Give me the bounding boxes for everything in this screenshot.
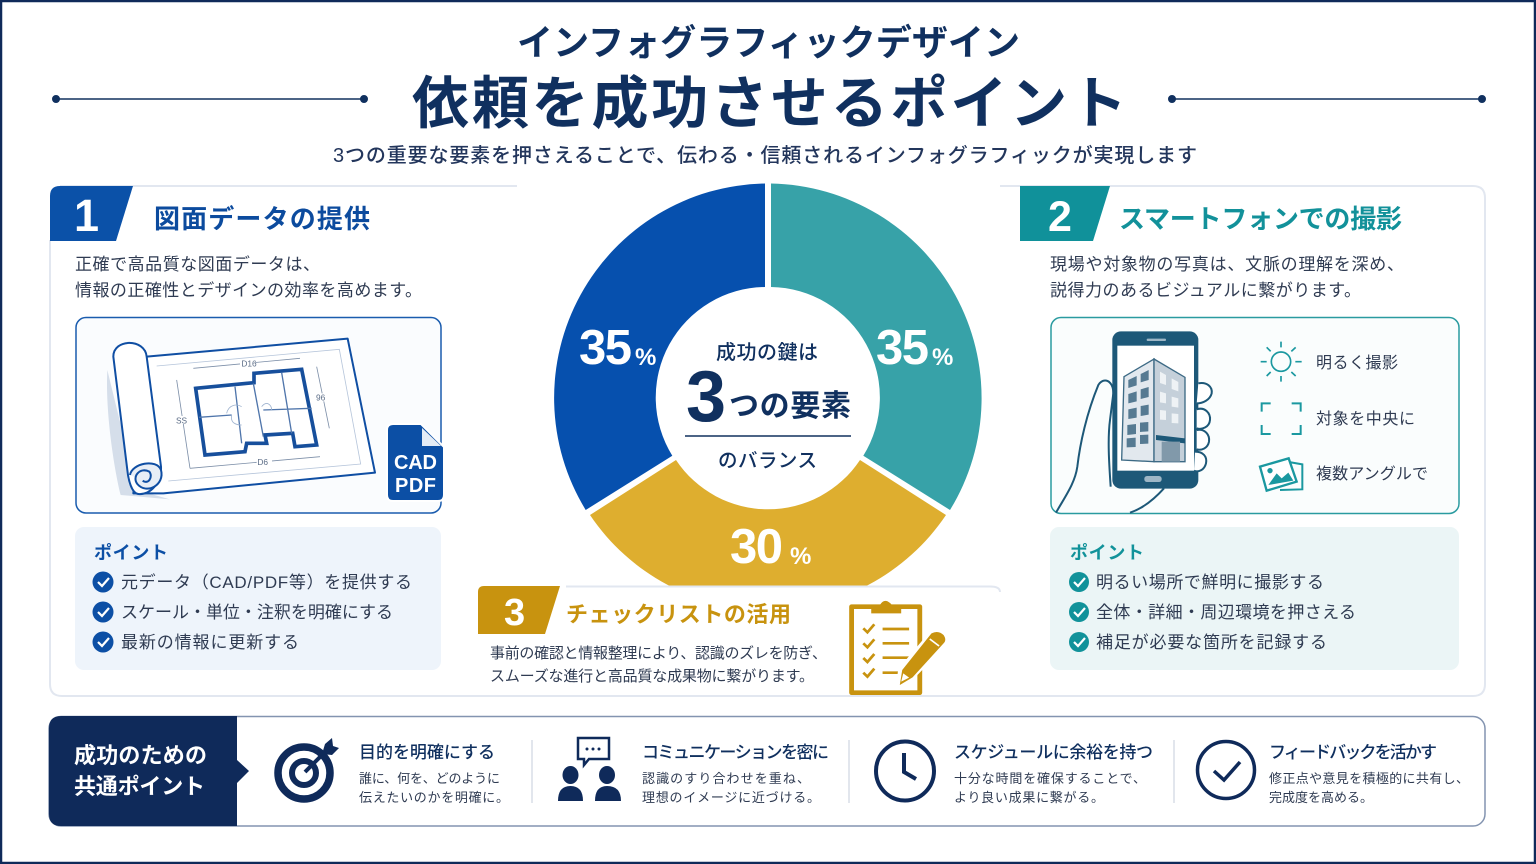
bottom common points bar — [49, 716, 1485, 826]
description: 現場や対象物の写真は、文脈の理解を深め、 — [1050, 255, 1404, 274]
heading: チェックリストの活用 — [566, 602, 791, 627]
item 4: feedback: フィードバックを活かす — [1269, 743, 1437, 762]
subtitle: 3つの重要な要素を押さえることで、伝わる・信頼されるインフォグラフィックが実現します — [333, 144, 1197, 167]
title line 1: インフォグラフィックデザイン — [517, 22, 1020, 63]
segment: gold 30% — [590, 460, 946, 610]
label: teal 35% — [876, 321, 953, 375]
item 3: schedule: スケジュールに余裕を持つ — [954, 743, 1153, 762]
illustration box: phone — [1051, 318, 1459, 514]
label: gold 30%: % — [790, 543, 811, 570]
title line 2: 依頼を成功させるポイント — [412, 72, 1127, 136]
item 3: schedule: 十分な時間を確保することで、 — [954, 771, 1146, 786]
points box: ポイント — [1070, 542, 1144, 563]
blueprint sheet — [107, 339, 375, 499]
heading: スマートフォンでの撮影 — [1119, 204, 1402, 234]
icon: people with speech bubble — [558, 738, 621, 801]
points box: ポイント — [94, 542, 168, 563]
panel 3: checklist — [478, 586, 1000, 695]
label: blue 35%: % — [635, 344, 656, 371]
item 2: communication — [558, 738, 829, 805]
tab: number 3 — [478, 586, 560, 634]
center text: つの要素 — [729, 390, 851, 423]
item 3: schedule: より良い成果に繋がる。 — [954, 790, 1104, 805]
icon labels: 対象を中央に — [1316, 410, 1415, 428]
tab: number 3: 3 — [504, 592, 525, 634]
point list: 元データ（CAD/PDF等）を提供する — [121, 572, 412, 592]
icon: CAD PDF file — [387, 424, 444, 501]
icon: check circle — [1198, 742, 1254, 798]
panel 2: smartphone photography — [1020, 186, 1459, 670]
point list: 全体・詳細・周辺環境を押さえる — [1096, 603, 1356, 622]
panel 1: drawing data — [50, 186, 444, 670]
segment: blue 35% — [554, 184, 765, 510]
description — [75, 254, 422, 300]
description: 事前の確認と情報整理により、認識のズレを防ぎ、 — [490, 645, 827, 662]
illustration box: blueprint: D6 — [257, 457, 268, 467]
main panel outline — [50, 186, 1485, 696]
icon: target — [278, 738, 339, 799]
item 4: feedback: 修正点や意見を積極的に共有し、 — [1269, 771, 1469, 786]
point list: 明るい場所で鮮明に撮影する — [1096, 573, 1324, 592]
center text — [685, 341, 851, 472]
label: teal 35%: 35 — [876, 321, 929, 375]
center text: のバランス — [718, 450, 817, 472]
icon: hand holding phone — [1056, 331, 1212, 513]
icon labels — [1316, 354, 1428, 483]
donut chart — [554, 184, 982, 610]
label: common points — [49, 716, 249, 826]
icon: sun — [1261, 342, 1302, 382]
label: teal 35%: % — [932, 344, 953, 371]
item 2: communication: コミュニケーションを密に — [642, 743, 829, 762]
center text: 3 — [686, 357, 726, 437]
illustration box: blueprint — [76, 318, 444, 513]
illustration box: blueprint: 96 — [316, 393, 326, 403]
description: スムーズな進行と高品質な成果物に繋がります。 — [490, 667, 814, 685]
points box — [1050, 527, 1459, 670]
tab: number 1: 1 — [74, 190, 99, 241]
illustration box: blueprint: D16 — [241, 359, 257, 369]
point list: 最新の情報に更新する — [121, 633, 299, 652]
icon labels: 明るく撮影 — [1316, 354, 1398, 372]
tab: number 1 — [50, 186, 133, 241]
item 1: clear purpose: 目的を明確にする — [359, 743, 495, 762]
tab: number 2: 2 — [1048, 193, 1072, 241]
building — [1122, 359, 1185, 462]
item 1: clear purpose — [278, 738, 509, 805]
label: gold 30%: 30 — [730, 520, 783, 574]
label: blue 35% — [579, 321, 656, 375]
description: 情報の正確性とデザインの効率を高めます。 — [75, 280, 422, 300]
item 1: clear purpose: 誰に、何を、どのように — [359, 771, 500, 786]
description — [490, 645, 827, 685]
icon: photos — [1260, 458, 1302, 491]
description — [1050, 255, 1404, 300]
icon: clock — [876, 742, 934, 800]
item 1: clear purpose: 伝えたいのかを明確に。 — [359, 790, 509, 805]
icon labels: 複数アングルで — [1316, 465, 1428, 483]
point list: スケール・単位・注釈を明確にする — [121, 603, 393, 622]
illustration box: blueprint: SS — [176, 416, 188, 426]
point list — [1069, 572, 1356, 652]
item 4: feedback: 完成度を高める。 — [1269, 790, 1373, 805]
item 4: feedback — [1198, 742, 1469, 805]
point list: 補足が必要な箇所を記録する — [1096, 633, 1327, 652]
points box — [75, 527, 441, 670]
center text: 成功の鍵は — [716, 341, 818, 364]
title block — [333, 22, 1197, 167]
segment: teal 35% — [771, 184, 982, 510]
item 2: communication: 認識のすり合わせを重ね、 — [642, 771, 810, 786]
icon: CAD PDF file: CAD — [394, 452, 437, 474]
icon: clipboard and pencil — [852, 601, 945, 693]
item 3: schedule — [876, 742, 1153, 805]
tab: number 2 — [1020, 186, 1110, 241]
floor plan — [196, 369, 317, 455]
label: common points: 共通ポイント — [74, 774, 205, 799]
label: gold 30% — [730, 520, 811, 574]
icon: CAD PDF file: PDF — [395, 475, 436, 497]
icon: focus frame — [1262, 403, 1301, 434]
label: blue 35%: 35 — [579, 321, 632, 375]
item 2: communication: 理想のイメージに近づける。 — [642, 790, 820, 805]
heading: 図面データの提供 — [154, 204, 370, 234]
description: 説得力のあるビジュアルに繋がります。 — [1050, 281, 1361, 300]
label: common points: 成功のための — [74, 743, 207, 768]
description: 正確で高品質な図面データは、 — [75, 254, 320, 274]
point list — [92, 572, 412, 652]
